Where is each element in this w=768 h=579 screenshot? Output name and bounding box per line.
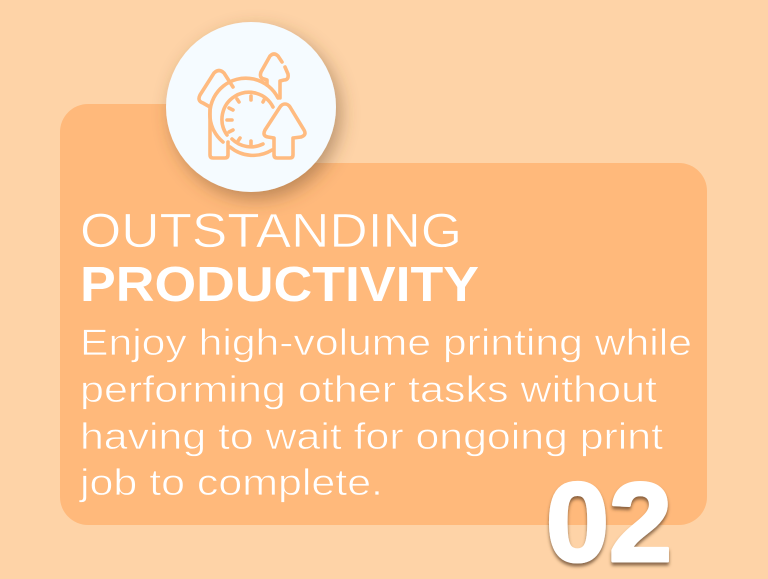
panel: orange card bbox=[60, 104, 707, 525]
icon: clock with rising arrows bbox=[199, 54, 305, 158]
heading line: OUTSTANDING: OUTSTANDING bbox=[80, 205, 462, 258]
body text: job to complete. bbox=[79, 462, 383, 503]
body text: having to wait for ongoing print bbox=[80, 416, 664, 457]
body text: Enjoy high-volume printing while bbox=[80, 322, 692, 363]
body text bbox=[79, 322, 692, 503]
icon badge: productivity clock and arrows bbox=[166, 22, 336, 192]
body text: performing other tasks without bbox=[80, 369, 658, 410]
heading line: PRODUCTIVITY: PRODUCTIVITY bbox=[80, 258, 479, 312]
heading bbox=[80, 205, 479, 312]
